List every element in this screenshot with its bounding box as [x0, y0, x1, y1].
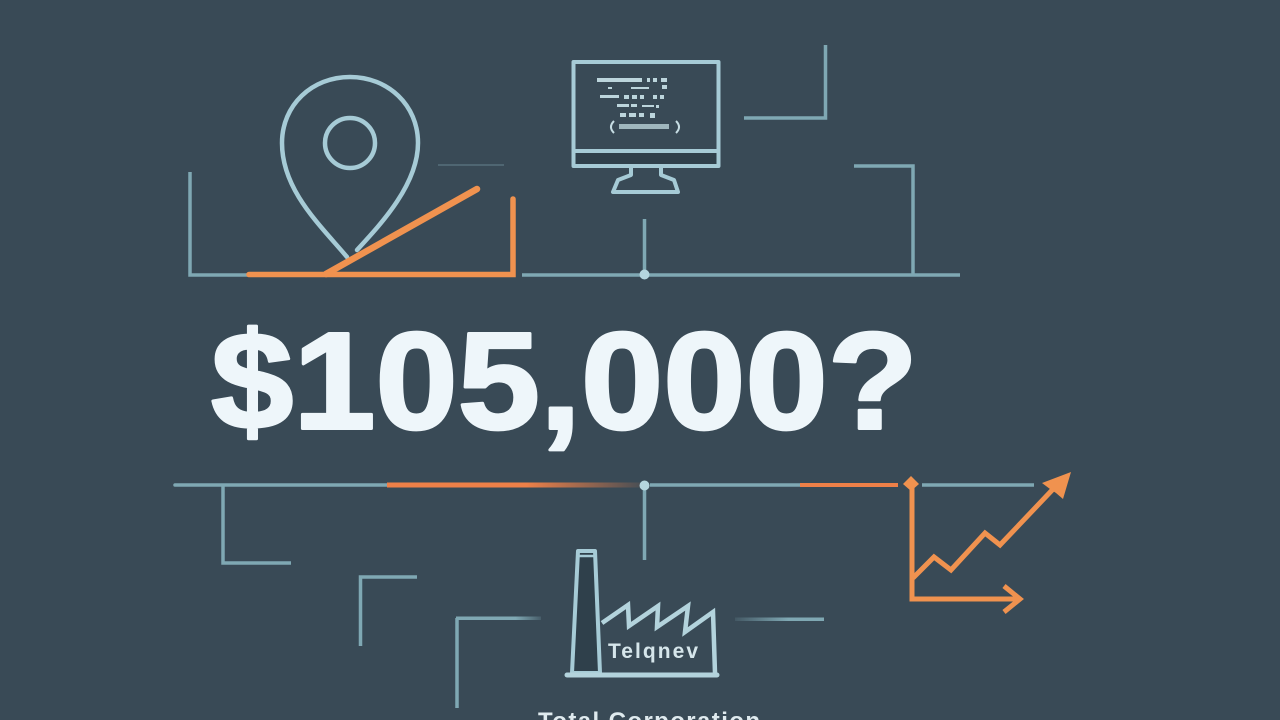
headline figure: $105,000? [211, 304, 918, 458]
upper timeline [522, 166, 960, 280]
icon: computer monitor [574, 62, 718, 192]
upper left bracket [190, 172, 250, 275]
upper right bracket [744, 45, 826, 118]
lower left bracket [223, 485, 291, 563]
icon: factory [567, 551, 717, 675]
lower timeline [175, 480, 1034, 560]
lower middle bracket [360, 577, 417, 646]
orange angle accent [249, 189, 513, 274]
factory label: Telqnev [608, 640, 698, 663]
icon: growth chart [903, 472, 1071, 612]
lower bracket near factory [456, 616, 541, 708]
screen code lines [597, 78, 669, 129]
icon: location pin [282, 77, 418, 257]
line right of factory [735, 618, 824, 621]
faint connector line [438, 164, 504, 166]
